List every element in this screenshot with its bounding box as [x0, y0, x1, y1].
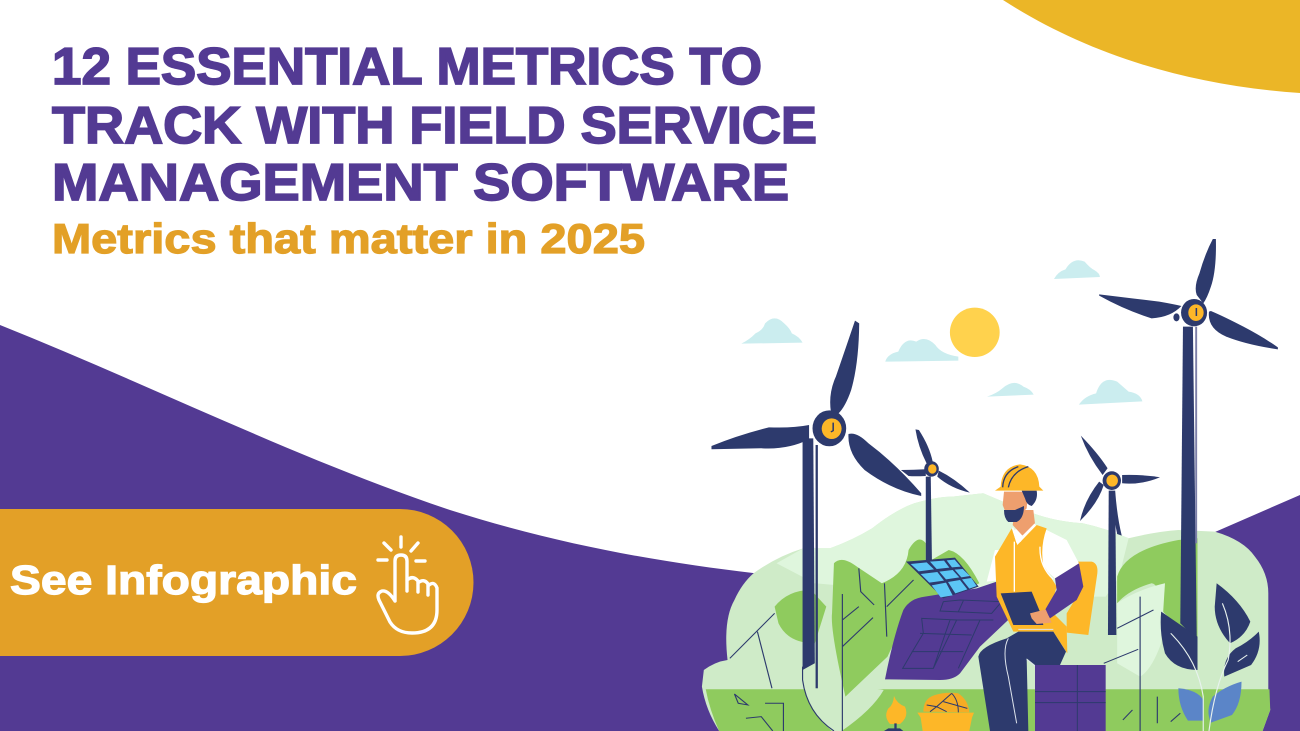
illustration: wind turbines and engineer — [702, 239, 1278, 731]
navy leaves — [1161, 583, 1260, 677]
engineer — [884, 464, 1106, 731]
basket fruit — [923, 693, 969, 712]
backpack — [1067, 562, 1097, 635]
wind turbine: right large — [1099, 239, 1278, 640]
title — [52, 38, 817, 212]
wind turbine: small right — [1080, 436, 1160, 635]
hat ridges — [1003, 467, 1028, 487]
tablet — [1001, 592, 1043, 625]
beard — [1004, 506, 1024, 522]
call to action button — [0, 509, 474, 656]
purple wave — [0, 325, 1300, 731]
hard hat — [995, 464, 1043, 491]
solar panel in front — [885, 582, 1012, 680]
button shape — [0, 509, 474, 656]
box lines — [1035, 665, 1106, 731]
subtitle: Metrics that matter in 2025 — [52, 215, 645, 262]
hub tick — [831, 423, 833, 432]
fine plant lines — [730, 568, 1180, 731]
green ground — [706, 689, 1270, 731]
sleeve — [1045, 563, 1083, 618]
seat box — [1035, 665, 1106, 731]
face — [1003, 492, 1028, 515]
icon: pointing hand — [378, 537, 437, 633]
title: MANAGEMENT SOFTWARE — [52, 154, 789, 212]
hair — [1022, 491, 1037, 506]
hand — [1030, 609, 1052, 624]
panel grid — [903, 600, 1002, 668]
solar laptop — [906, 558, 979, 598]
title: 12 ESSENTIAL METRICS TO — [52, 38, 762, 96]
wind turbine: left large — [711, 321, 921, 688]
light green hills — [702, 493, 1270, 731]
hub tick — [1194, 308, 1198, 316]
pale highlight right of tower — [1117, 583, 1165, 677]
green trees and bushes — [775, 538, 1198, 697]
hub — [1106, 475, 1118, 487]
title: TRACK WITH FIELD SERVICE — [52, 97, 817, 155]
trouser highlight — [1005, 629, 1053, 723]
pale path across ground — [803, 630, 884, 731]
hub — [1188, 304, 1204, 321]
sun — [950, 308, 1000, 357]
neck — [1013, 510, 1035, 537]
stems — [1171, 603, 1247, 731]
button label: See Infographic — [10, 557, 357, 603]
vest — [995, 525, 1067, 653]
pale green upper hill — [777, 493, 1129, 597]
clouds — [741, 260, 1142, 405]
legs — [978, 632, 1066, 731]
blue leaves — [1178, 682, 1242, 723]
collar and vest trim — [1013, 524, 1053, 592]
basket — [917, 713, 974, 731]
shirt — [987, 525, 1079, 582]
candle base — [884, 723, 903, 731]
flame — [886, 696, 906, 724]
wind turbine: small left — [901, 429, 970, 560]
hub — [928, 464, 937, 474]
yellow corner shape — [1003, 0, 1300, 93]
hub — [822, 418, 842, 439]
laptop cells — [911, 560, 977, 597]
leaf plant — [1161, 583, 1260, 731]
